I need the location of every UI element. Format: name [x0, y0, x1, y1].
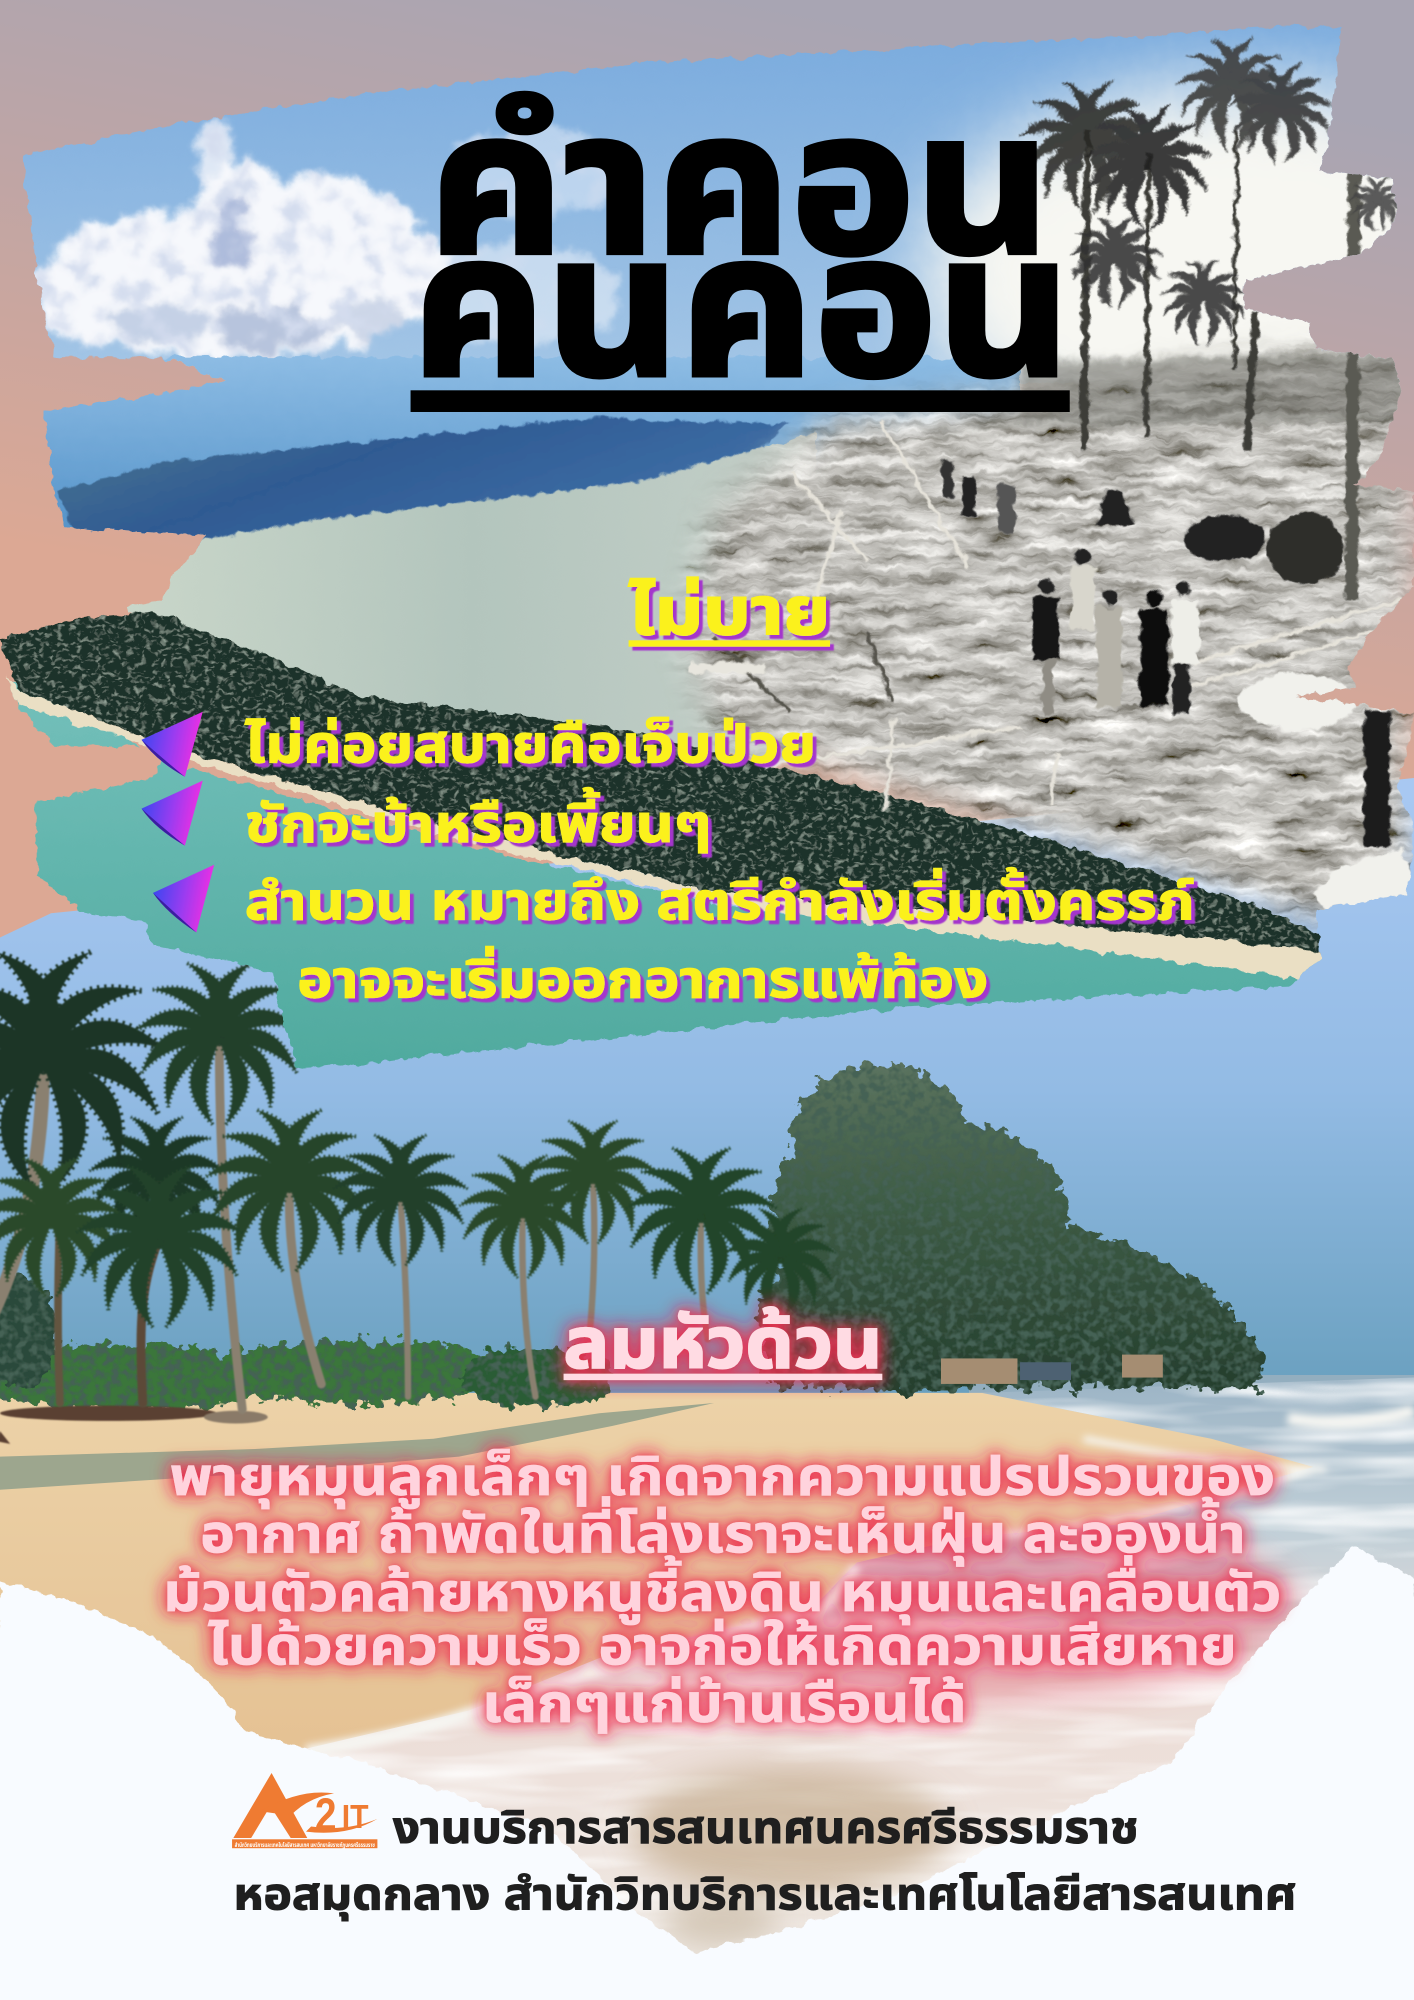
title — [411, 74, 1071, 418]
fallen logs — [714, 421, 1403, 810]
description: เล็กๆแก่บ้านเรือนได้ — [482, 1675, 966, 1734]
huts — [941, 1355, 1163, 1384]
footer text — [233, 1804, 1297, 1921]
logo caption: สำนักวิทยบริการและเทคโนโลยีสารสนเทศ มหาวิทยาลัยราชภัฏนครศรีธรรมราช — [235, 1841, 375, 1849]
shrubs — [0, 1277, 612, 1411]
subheading: ไม่บาย — [629, 575, 830, 649]
tree mass — [759, 1062, 1262, 1393]
description — [163, 1448, 1281, 1734]
old palm trunks — [1084, 128, 1354, 599]
people group — [944, 462, 1390, 847]
logo: A2IT: IT — [342, 1799, 368, 1836]
title line 2: คนคอน — [412, 196, 1071, 418]
lagoon — [128, 434, 816, 765]
footer text: งานบริการสารสนเทศนครศรีธรรมราช — [393, 1804, 1139, 1853]
dark tree line — [1020, 351, 1414, 427]
swoosh — [260, 1792, 334, 1821]
section: ไม่บาย — [142, 575, 1195, 1009]
bright sky in old photo — [924, 83, 1414, 466]
description: อากาศ ถ้าพัดในที่โล่งเราจะเห็นฝุ่น ละอองน้ำ — [200, 1496, 1246, 1566]
sky — [0, 778, 1414, 2000]
sea — [0, 357, 1020, 548]
numeral and letters: 2 — [315, 1788, 337, 1840]
photo: palm beach — [0, 778, 1414, 2000]
white mounds — [689, 663, 1414, 908]
letter A — [233, 1773, 307, 1838]
icon: bullet cone 3 — [153, 865, 214, 932]
beach line — [0, 666, 1326, 982]
bullet list — [245, 717, 1195, 1009]
forest strip — [0, 612, 1326, 954]
sand — [0, 1393, 1414, 2000]
clouds — [38, 121, 625, 361]
teal water — [0, 676, 1326, 1084]
subheading: ลมหัวด้วน — [564, 1303, 882, 1383]
bullet list: ชักจะบ้าหรือเพี้ยนๆ — [245, 787, 711, 854]
bullet list: สำนวน หมายถึง สตรีกำลังเริ่มตั้งครรภ์ — [245, 866, 1195, 932]
description: ม้วนตัวคล้ายหางหนูชี้ลงดิน หมุนและเคลื่อนตัว — [163, 1555, 1281, 1625]
far island — [57, 418, 791, 546]
bullet list: อาจจะเริ่มออกอาการแพ้ท้อง — [297, 946, 988, 1009]
white wave crests — [306, 1411, 1414, 1751]
footer text: หอสมุดกลาง สำนักวิทบริการและเทศโนโลยีสารสนเทศ — [233, 1870, 1297, 1921]
title line 1: คำคอน — [428, 74, 1051, 296]
title underline — [411, 390, 1070, 412]
old palm crowns — [1018, 33, 1406, 345]
section: ลมหัวด้วน — [163, 1303, 1281, 1734]
photo collage: tsunami brush stroke — [0, 0, 1414, 1084]
old photo ground — [612, 319, 1414, 957]
sky — [0, 0, 1414, 383]
sea horizon — [969, 1375, 1414, 1413]
description: ไปด้วยความเร็ว อาจก่อให้เกิดความเสียหาย — [208, 1618, 1237, 1677]
palm crowns — [0, 940, 837, 1327]
logo: A2IT — [232, 1773, 377, 1849]
torn white bottom area — [0, 1547, 1414, 2000]
ocean — [307, 1378, 1414, 1954]
bullet list: ไม่ค่อยสบายคือเจ็บป่วย — [245, 717, 816, 775]
white mask — [0, 1547, 1414, 2000]
icon: bullet cone 1 — [142, 712, 203, 777]
description: พายุหมุนลูกเล็กๆ เกิดจากความแปรปรวนของ — [170, 1448, 1275, 1509]
mounds and stump — [1097, 491, 1344, 584]
beach debris — [0, 1406, 268, 1444]
arc — [306, 1819, 377, 1833]
icon: bullet cone 2 — [142, 781, 203, 846]
logo bar — [232, 1839, 377, 1848]
palm trunks — [0, 1041, 708, 1409]
wet sand channel — [0, 1403, 714, 1490]
